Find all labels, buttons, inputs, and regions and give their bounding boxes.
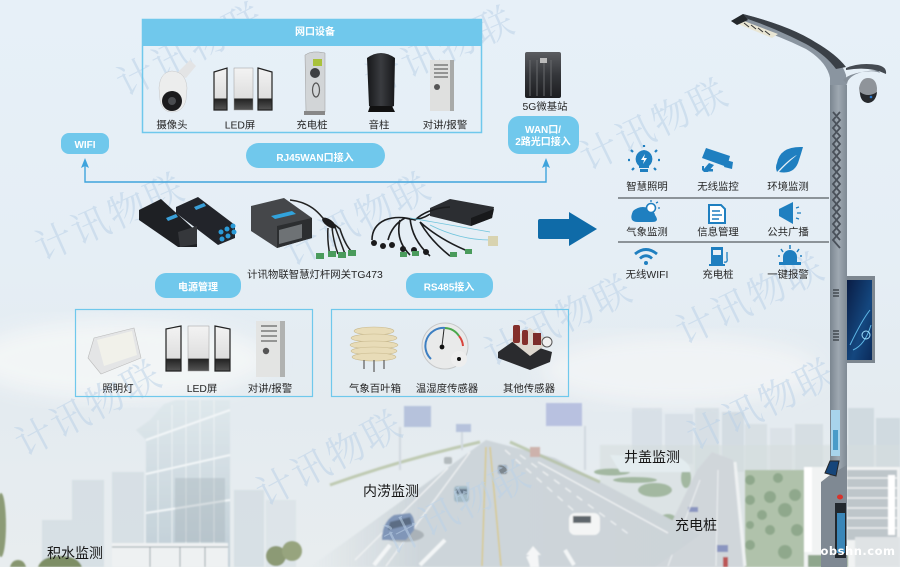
lawn and trees bbox=[594, 468, 807, 567]
pill: RJ45 bbox=[246, 143, 385, 168]
function labels: 环境监测 bbox=[767, 180, 809, 193]
device labels: 摄像头 bbox=[156, 118, 188, 132]
scene labels: 充电桩 bbox=[675, 517, 717, 533]
device: power modules bbox=[139, 197, 236, 247]
device: TG473 gateway bbox=[251, 198, 356, 259]
pole arm and lamp head bbox=[731, 14, 847, 90]
function labels: 信息管理 bbox=[697, 226, 739, 238]
scene labels: 内涝监测 bbox=[363, 483, 419, 499]
pill: WIFI: WIFI bbox=[74, 140, 96, 151]
pole base bbox=[821, 465, 847, 567]
power device labels: 照明灯 bbox=[102, 383, 134, 395]
glass tower bbox=[112, 400, 230, 567]
pill: power management bbox=[155, 273, 241, 298]
device: RS485 cables gateway bbox=[371, 199, 498, 257]
panel header bbox=[142, 19, 482, 46]
power device labels: LED屏 bbox=[187, 383, 217, 395]
device labels: 充电桩 bbox=[296, 118, 328, 132]
watermarks: 计讯物联 bbox=[272, 156, 440, 278]
icon: LED screens bbox=[166, 326, 230, 371]
icon: alarm bbox=[778, 245, 802, 265]
icon: flood light bbox=[88, 328, 141, 374]
median and signs bbox=[330, 442, 480, 485]
pill: power management: 电源管理 bbox=[178, 280, 218, 294]
right buildings bbox=[804, 467, 900, 567]
pill: WAN bbox=[508, 116, 579, 154]
watermarks: 计讯物联 bbox=[3, 344, 170, 468]
arrow: connection bracket bbox=[81, 158, 550, 182]
icon: speaker column bbox=[367, 53, 395, 112]
icon: weather bbox=[631, 200, 660, 222]
watermarks: 计讯物联 bbox=[24, 157, 193, 272]
function labels bbox=[626, 180, 809, 281]
power device labels bbox=[102, 382, 292, 395]
scene labels: 井盖监测 bbox=[624, 449, 680, 465]
function labels: 无线监控 bbox=[697, 180, 739, 193]
foreground trees bbox=[0, 493, 302, 567]
pole pattern bbox=[833, 112, 840, 248]
cars bbox=[382, 513, 424, 542]
icon: LED screens bbox=[214, 68, 272, 110]
kiosk touch screen bbox=[825, 461, 839, 476]
icon: smart lighting bbox=[628, 145, 660, 172]
left towers faded bbox=[42, 472, 296, 567]
icon: leaf bbox=[776, 147, 803, 172]
ground fade right bbox=[600, 445, 900, 567]
sensor labels: 温湿度传感器 bbox=[416, 382, 479, 395]
side road bbox=[650, 452, 745, 567]
pill: RS485: RS485接入 bbox=[424, 280, 474, 294]
icon: charging pile bbox=[304, 52, 325, 115]
watermarks: 计讯物联 bbox=[665, 236, 833, 356]
pond bbox=[610, 455, 690, 472]
LED display bbox=[847, 276, 875, 363]
icon: document bbox=[709, 205, 725, 223]
icon: pole camera bbox=[859, 78, 877, 103]
arrow: main flow bbox=[538, 212, 597, 246]
icon: dome camera bbox=[159, 60, 196, 112]
panel: sensors bbox=[332, 310, 568, 396]
sensor labels: 气象百叶箱 bbox=[349, 382, 401, 395]
panel header: 网口设备 bbox=[295, 25, 335, 38]
icon: other sensor bbox=[498, 325, 552, 370]
device labels: LED屏 bbox=[225, 120, 255, 132]
power device labels: 对讲/报警 bbox=[248, 382, 292, 395]
scene labels bbox=[47, 449, 717, 561]
pill: RJ45: RJ45WAN口接入 bbox=[276, 151, 354, 164]
function labels: 一键报警 bbox=[767, 268, 809, 281]
smart pole bbox=[731, 14, 886, 567]
alarm button bbox=[837, 494, 843, 500]
sensor labels bbox=[349, 382, 556, 395]
icon: intercom bbox=[430, 60, 454, 111]
function grid bbox=[618, 145, 829, 281]
icon: louver box bbox=[350, 327, 398, 372]
small display bbox=[831, 410, 840, 456]
function labels: 公共广播 bbox=[767, 226, 809, 238]
background city scene bbox=[0, 320, 900, 567]
speaker grilles bbox=[833, 290, 839, 340]
device labels bbox=[156, 118, 467, 132]
watermarks: 计讯物联 bbox=[473, 258, 641, 378]
panel: network devices bbox=[142, 19, 482, 132]
icon: speaker bbox=[779, 202, 801, 224]
pill: WIFI bbox=[61, 133, 109, 154]
device labels: 音柱 bbox=[369, 118, 389, 132]
pill: WAN: WAN口/ bbox=[525, 125, 561, 136]
icon: hygrometer gauge bbox=[422, 323, 468, 369]
device labels: 对讲/报警 bbox=[423, 118, 467, 132]
watermarks: 计讯物联 bbox=[244, 394, 411, 518]
gateway label: 计讯物联智慧灯杆网关TG473 bbox=[247, 268, 383, 281]
5G micro base station: 5G微基站 bbox=[522, 100, 568, 113]
icon: wireless camera bbox=[702, 148, 733, 172]
scene labels: 积水监测 bbox=[47, 545, 103, 561]
base screen bbox=[835, 503, 846, 558]
function labels: 充电桩 bbox=[702, 268, 734, 281]
function labels: 气象监测 bbox=[626, 226, 668, 238]
pill: RS485 bbox=[406, 273, 493, 298]
5G micro base station bbox=[522, 52, 568, 113]
main road bbox=[310, 403, 700, 567]
function labels: 智慧照明 bbox=[626, 180, 668, 193]
icon: intercom bbox=[256, 321, 285, 377]
watermarks: 计讯物联 bbox=[569, 62, 737, 182]
sensor labels: 其他传感器 bbox=[503, 382, 556, 395]
icon: wifi bbox=[635, 250, 657, 265]
panel: power devices bbox=[76, 310, 312, 396]
corner site mark: obshn.com bbox=[821, 544, 895, 558]
pole shaft bbox=[830, 85, 847, 485]
pill: WAN: 2路光口接入 bbox=[515, 135, 571, 148]
watermarks: 计讯物联 bbox=[372, 444, 540, 566]
function labels: 无线WIFI bbox=[626, 268, 668, 281]
distant skyline right bbox=[632, 408, 900, 504]
icon: EV charger bbox=[709, 247, 727, 266]
watermarks: 计讯物联 bbox=[676, 342, 844, 462]
second arm bbox=[843, 64, 886, 84]
